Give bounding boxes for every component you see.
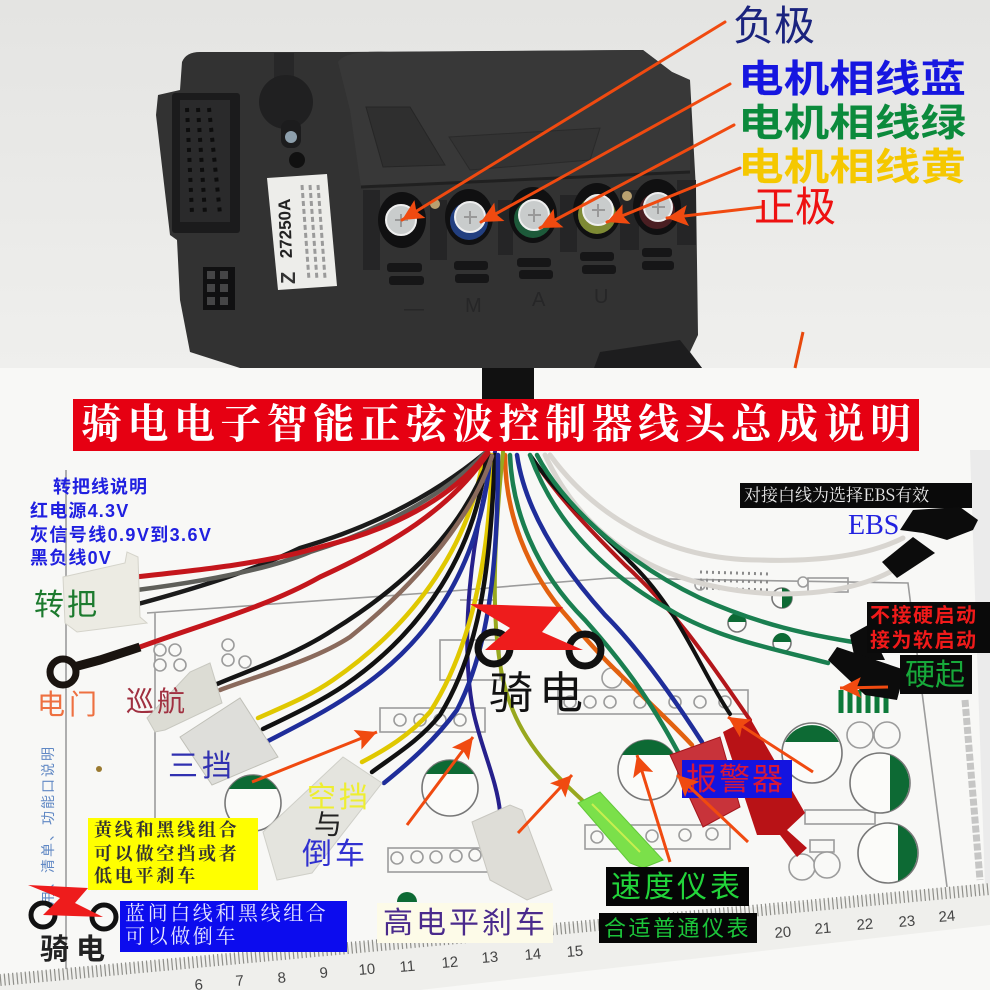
label: cruise: 巡航 [126,686,188,717]
label: motor phase blue: 电机相线蓝 [738,59,966,101]
label: and: 与 [314,809,342,840]
ruler: 11 [399,958,416,976]
hard start green wires [530,455,853,663]
lower photo paper background [0,368,990,990]
terminal polarity marks: U [594,286,608,308]
wire harness [135,368,903,812]
throttle notes [30,477,212,568]
ignition ring terminal [50,647,140,685]
callout: low level brake: 低电平刹车 [94,862,198,888]
arrow to three speed [252,732,377,782]
title banner: 骑电电子智能正弦波控制器线头总成说明 [81,391,911,450]
ruler [0,883,990,990]
controller photo [156,50,702,368]
label: speedometer: 速度仪表 [611,871,743,904]
ruler: 13 [481,949,499,967]
alarm orange, green, blue wires [505,455,702,752]
throttle notes: 红电源4.3V [30,501,129,521]
label: positive: 正极 [754,184,836,230]
soft start note: 不接硬启动 [870,604,976,627]
label: motor phase yellow: 电机相线黄 [738,147,966,189]
green pin strip [841,690,886,713]
callout: reverse: 可以做倒车 [125,920,238,949]
alarm red and black wires [530,455,750,720]
ruler: 22 [856,916,874,934]
right margin print [965,700,980,880]
label: neutral: 空挡 [307,781,371,814]
throttle and ignition wires [140,453,488,647]
label: high level brake: 高电平刹车 [383,907,548,940]
throttle notes: 灰信号线0.9V到3.6V [30,525,212,545]
hard start connector [828,647,905,700]
label: hard start: 硬起 [905,659,965,692]
controller label: Z [278,272,300,284]
callout: low level brake: 可以做空挡或者 [94,840,240,866]
terminal clips [387,248,674,285]
throttle notes: 转把线说明 [53,477,148,497]
label: throttle: 转把 [34,589,100,622]
red alarm connectors [670,718,807,857]
speedometer green connector [578,792,663,868]
terminal polarity marks: M [465,295,482,317]
controller label [267,174,337,290]
ruler: 23 [898,913,916,931]
terminal polarity marks: A [532,289,546,311]
label: reverse: 倒车 [302,838,368,871]
small arrow fragment [795,332,803,368]
arrow to brake wire [518,775,572,833]
ruler: 24 [938,908,956,926]
round port cap [259,53,313,168]
brand logo centre [470,604,601,718]
label: negative: 负极 [733,3,815,49]
throttle connector [63,552,147,632]
high level brake connector [472,805,552,900]
label: alarm: 报警器 [686,762,785,797]
connector block [172,93,240,233]
EBS connectors [882,507,978,578]
arrow to speed wire [637,755,670,862]
brand logo small [28,885,116,966]
capacitors on board [225,588,918,902]
callout: low level brake [88,816,258,890]
label: motor phase green: 电机相线绿 [738,103,966,145]
ruler: 12 [441,954,459,972]
ruler: 14 [524,946,542,964]
label: three speed: 三挡 [168,750,236,783]
terminal screws [378,179,681,248]
cruise wires [217,456,492,690]
top photo background [0,0,990,368]
soft start note: 接为软启动 [870,629,976,652]
callout: reverse [120,897,347,952]
soft start note [867,602,990,653]
label: suits standard meter: 合适普通仪表 [604,916,751,941]
three speed wires [258,460,490,741]
ruler: 20 [774,924,792,942]
callout: low level brake: 黄线和黑线组合 [94,816,240,842]
neutral reverse connector [263,757,382,880]
white EBS wires [545,455,903,594]
EBS note: 对接白线为选择EBS有效 [744,481,929,506]
small six-pin connector [203,267,235,310]
wall dot [96,766,102,772]
arrows to terminals [402,22,762,228]
brand logo small: 骑电 [40,933,112,966]
ruler: 15 [566,943,584,961]
ruler: 9 [319,964,329,982]
ruler: 7 [235,972,245,990]
label: EBS: EBS [848,510,899,541]
terminal polarity marks [404,286,608,320]
brand logo centre: 骑电 [489,669,589,718]
vertical board note: 用、清单、功能口说明 [40,745,56,905]
neutral wires [362,455,498,783]
arrows to alarm [677,717,813,842]
ruler: 21 [814,920,832,938]
brake and speed wires [467,452,500,812]
callout: reverse: 蓝间白线和黑线组合 [125,897,328,926]
label: ignition: 电门 [37,689,101,720]
arrow to hard start [840,687,888,688]
terminal polarity marks: — [404,298,424,320]
ruler: 8 [277,969,287,987]
arrow to yellow wire [407,737,473,825]
upper hard start connector [850,625,885,660]
cruise connector [147,663,222,732]
circuit board print on paper [66,470,947,975]
ruler: 10 [358,961,376,979]
controller label: 27250A [275,198,296,259]
three speed connector [180,698,278,785]
throttle notes: 黑负线0V [30,548,112,568]
